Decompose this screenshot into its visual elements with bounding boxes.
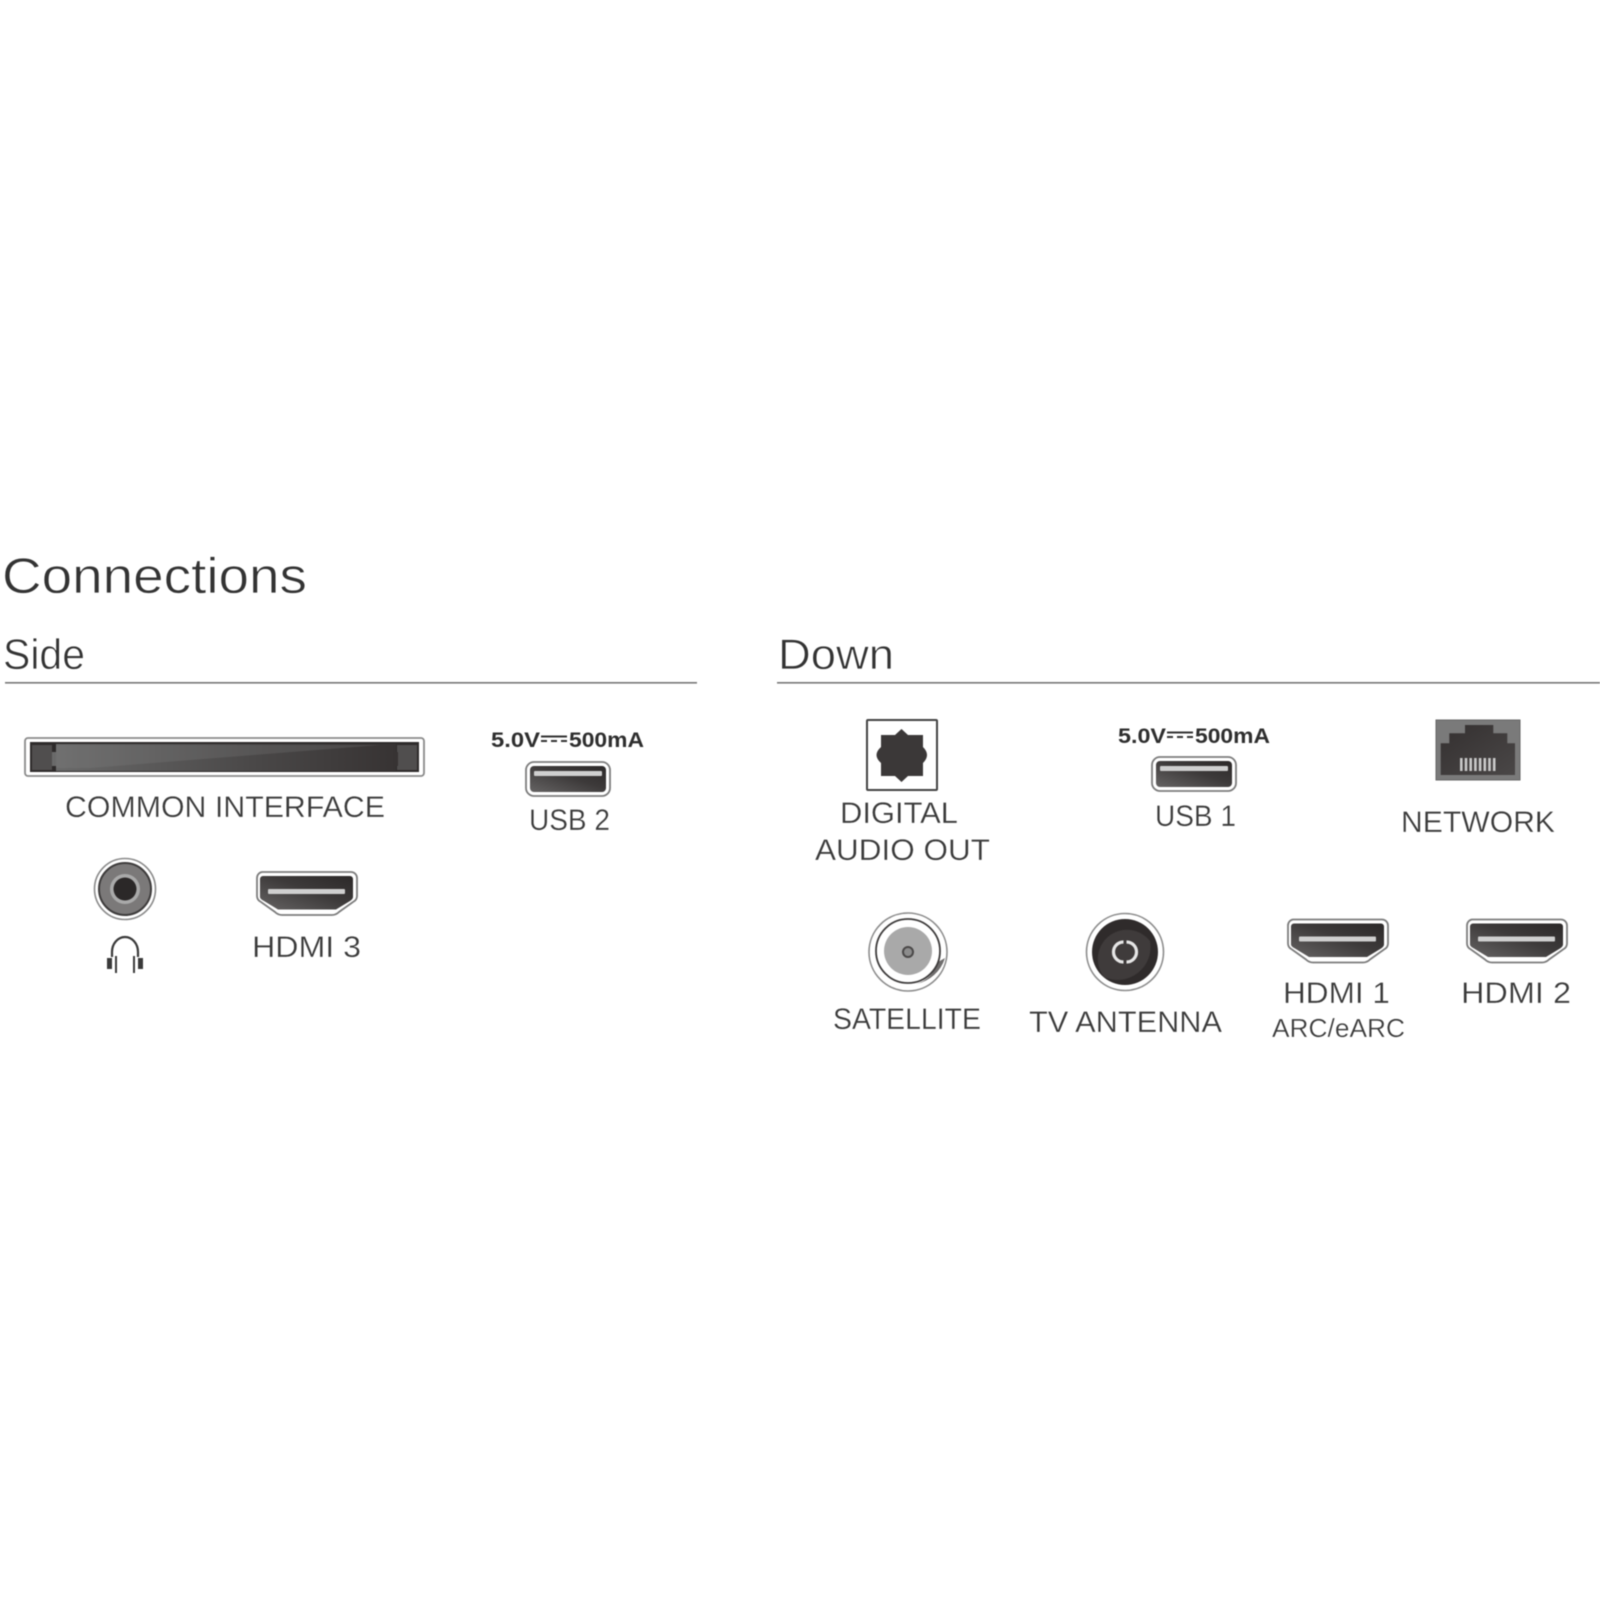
label: digital audio out: DIGITAL: [840, 797, 958, 830]
icon: headphones: [107, 937, 143, 973]
label: hdmi 1 arc: [1272, 977, 1405, 1043]
label: hdmi 1 arc: HDMI 1: [1283, 977, 1390, 1010]
label: hdmi 2: HDMI 2: [1461, 977, 1571, 1010]
title: Connections: [2, 548, 307, 604]
label: usb 2 power rating: [491, 729, 644, 752]
icon: tv antenna port: [1086, 914, 1164, 990]
icon: network port: [1436, 720, 1520, 780]
icon: usb 2 port: [526, 762, 610, 796]
label: usb 1 power rating: [1118, 725, 1270, 748]
label: tv antenna: TV ANTENNA: [1029, 1006, 1222, 1039]
label: satellite: SATELLITE: [833, 1003, 981, 1036]
label: digital audio out: AUDIO OUT: [815, 834, 990, 867]
heading: side: Side: [3, 631, 85, 679]
icon: hdmi 1 port: [1288, 920, 1388, 962]
label: hdmi 3: HDMI 3: [252, 931, 361, 964]
label: usb 2 power rating: 500mA: [569, 729, 644, 752]
label: usb 2: USB 2: [529, 804, 610, 837]
icon: headphone jack: [94, 858, 156, 920]
icon: hdmi 3 port: [257, 872, 357, 915]
icon: digital audio out port: [867, 720, 937, 790]
panel: down connections: [777, 631, 1600, 1043]
label: network: NETWORK: [1401, 806, 1555, 839]
label: common interface: COMMON INTERFACE: [65, 791, 385, 824]
label: usb 1: USB 1: [1155, 800, 1236, 833]
label: digital audio out: [815, 797, 990, 867]
panel: side connections: [3, 631, 697, 973]
label: usb 1 power rating: 500mA: [1195, 725, 1270, 748]
label: hdmi 1 arc: ARC/eARC: [1272, 1013, 1405, 1043]
label: usb 1 power rating: 5.0V: [1118, 725, 1166, 748]
icon: common interface slot: [25, 738, 424, 776]
icon: hdmi 2 port: [1467, 920, 1567, 962]
icon: satellite port: [869, 913, 947, 991]
icon: usb 1 port: [1152, 757, 1236, 791]
label: usb 2 power rating: 5.0V: [491, 729, 540, 752]
heading: down: Down: [778, 631, 894, 679]
